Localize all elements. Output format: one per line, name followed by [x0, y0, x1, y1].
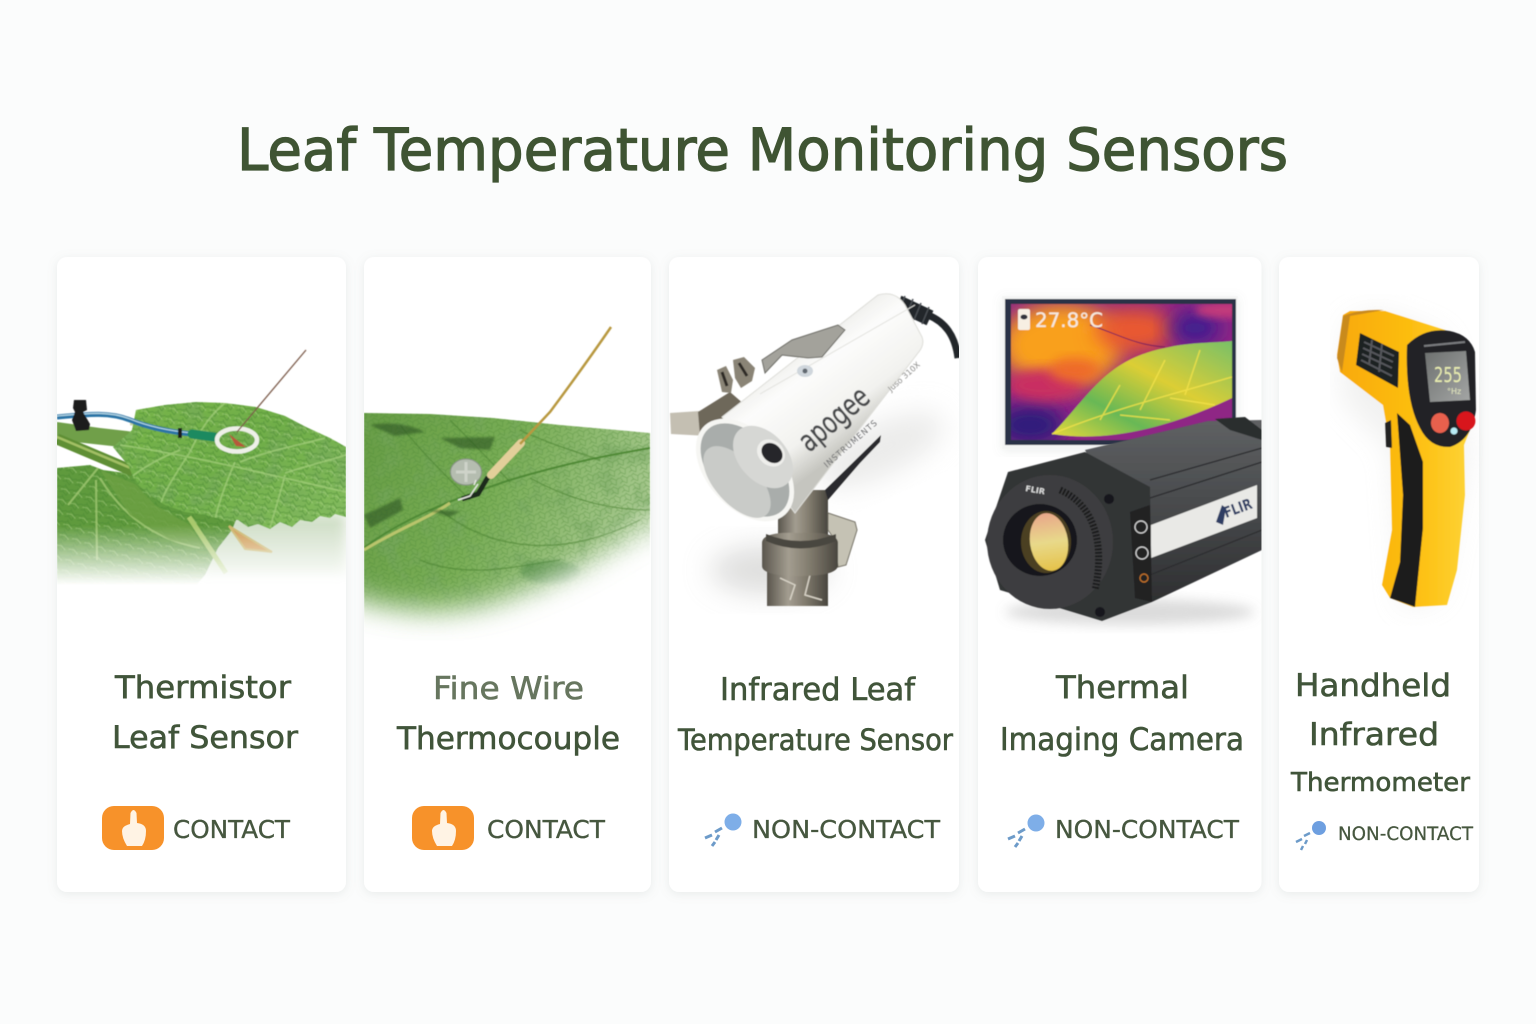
- top clip: [762, 325, 845, 373]
- badge: contact: CONTACT: [173, 815, 291, 844]
- metal disc and wire: [450, 459, 482, 485]
- label: Thermal Imaging Camera: Imaging Camera: [1000, 722, 1244, 758]
- label: Handheld Infrared Thermometer: Thermometer: [1290, 768, 1470, 798]
- apogee logo: INSTRUMENTS: [822, 418, 880, 470]
- badge: non-contact: [705, 814, 941, 846]
- exhaust grille: [1356, 333, 1399, 388]
- panel: thermal imaging camera: [978, 257, 1262, 892]
- label: Thermal Imaging Camera: [1000, 670, 1244, 758]
- white label strip: [1151, 485, 1257, 558]
- label: Fine Wire Thermocouple: Fine Wire: [433, 671, 584, 707]
- label: Thermistor Leaf Sensor: [112, 670, 298, 756]
- image: thermocouple on leaf: [364, 327, 651, 645]
- image: thermal display: [995, 296, 1255, 449]
- badge: contact: CONTACT: [487, 815, 606, 844]
- image: thermistor on leaf: [57, 350, 350, 592]
- image: handheld thermometer: [1337, 310, 1476, 610]
- panel: fine wire thermocouple: [364, 257, 651, 892]
- panel: handheld infrared thermometer: [1279, 257, 1479, 892]
- label: Infrared Leaf Temperature Sensor: Temperature Sensor: [677, 723, 953, 757]
- image: FLIR camera: [985, 417, 1262, 625]
- label: Infrared Leaf Temperature Sensor: Infrared Leaf: [720, 672, 916, 708]
- label: Handheld Infrared Thermometer: Handheld: [1295, 668, 1451, 704]
- handle stripe: [1390, 413, 1423, 607]
- apogee logo: Juso 310X: [886, 360, 922, 394]
- apogee logo: apogee: [792, 380, 877, 459]
- label: Thermistor Leaf Sensor: Leaf Sensor: [112, 720, 298, 756]
- main leaf: [112, 401, 346, 530]
- battery icon: [1018, 309, 1030, 330]
- label: Thermistor Leaf Sensor: Thermistor: [114, 670, 291, 706]
- label: Handheld Infrared Thermometer: [1290, 668, 1470, 798]
- label: Handheld Infrared Thermometer: Infrared: [1309, 717, 1439, 753]
- cylinder body: [722, 294, 923, 513]
- label: Fine Wire Thermocouple: [396, 671, 620, 757]
- badge: non-contact: NON-CONTACT: [1055, 815, 1240, 844]
- arm and wing nuts: [670, 410, 700, 436]
- post: [777, 489, 829, 535]
- image: FLIR camera: FLIR: [1025, 484, 1046, 496]
- title: Leaf Temperature Monitoring Sensors: [237, 116, 1288, 184]
- temperature reading: 27.8°C: [1035, 309, 1103, 332]
- lens: [987, 475, 1113, 609]
- sensor aperture: [696, 418, 794, 521]
- head: [1407, 330, 1476, 447]
- image: handheld thermometer: °Hz: [1447, 387, 1461, 396]
- body: [1337, 311, 1474, 607]
- panel: infrared leaf temperature sensor: [669, 257, 959, 892]
- reading: 255: [1434, 363, 1462, 387]
- trigger: [1385, 420, 1392, 448]
- badge: contact: [412, 806, 606, 850]
- label: Thermal Imaging Camera: Thermal: [1055, 670, 1189, 706]
- badge: non-contact: NON-CONTACT: [1338, 824, 1474, 845]
- image: FLIR camera: FLIR: [1221, 495, 1255, 522]
- buttons: [1431, 413, 1449, 433]
- label: Infrared Leaf Temperature Sensor: [677, 672, 953, 757]
- badge: non-contact: NON-CONTACT: [752, 815, 941, 844]
- image: apogee infrared sensor: [670, 294, 958, 606]
- badge: non-contact: [1296, 821, 1474, 850]
- label: Fine Wire Thermocouple: Thermocouple: [396, 721, 620, 757]
- wire and ring sensor: [57, 414, 192, 434]
- LCD display: [1425, 351, 1470, 402]
- badge: contact: [102, 806, 291, 850]
- badge: non-contact: [1008, 814, 1240, 847]
- front housing: [985, 452, 1152, 621]
- panel: thermistor leaf sensor: [57, 257, 350, 892]
- clamp under cylinder: [825, 435, 881, 500]
- control buttons: [1135, 521, 1147, 533]
- cable: [898, 303, 930, 318]
